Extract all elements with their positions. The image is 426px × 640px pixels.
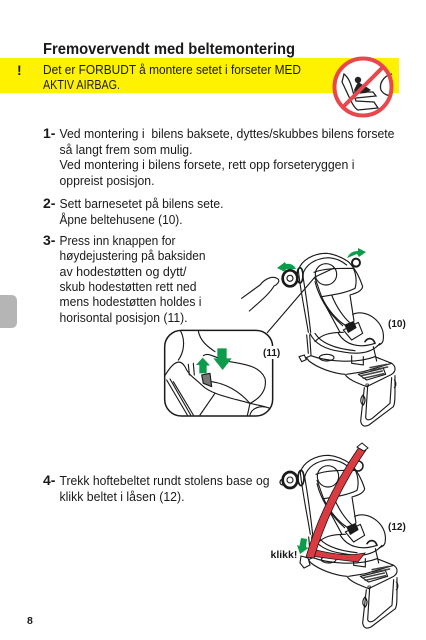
- knobs: [280, 461, 363, 488]
- step 3 text: 3-: [43, 232, 56, 248]
- hand and headrest knobs: [242, 259, 360, 311]
- step 1 text: Ved montering i bilens baksete, dyttes/skubbes bilens forsete: [60, 126, 394, 141]
- step 1 text: oppreist posisjon.: [60, 173, 154, 188]
- step 2 text: Sett barnesetet på bilens sete.: [60, 196, 224, 211]
- grey page tab: [0, 295, 17, 328]
- step 1 text: så langt frem som mulig.: [60, 142, 192, 157]
- step 1 text: Ved montering i bilens forsete, rett opp forseteryggen i: [60, 157, 355, 172]
- warning band: AKTIV AIRBAG.: [43, 77, 120, 92]
- leader line: [267, 268, 334, 333]
- step 3 text: mens hodestøtten holdes i: [60, 294, 202, 309]
- step 4 text: [43, 472, 270, 504]
- step 1 text: 1-: [43, 125, 56, 141]
- step 3 text: [43, 232, 206, 325]
- warning band: !: [17, 62, 22, 78]
- step 3 text: horisontal posisjon (11).: [60, 310, 188, 325]
- warning band: Det er FORBUDT å montere setet i forseter MED: [43, 62, 301, 77]
- step 3 text: høydejustering på baksiden: [60, 248, 206, 263]
- arrow: green down click: [297, 538, 308, 554]
- step 3 text: av hodestøtten og dytt/: [60, 264, 187, 279]
- title: Fremovervendt med beltemontering: [43, 41, 295, 58]
- belt end: [357, 443, 368, 451]
- arrow: green left: [277, 262, 296, 272]
- buckle: [300, 556, 310, 568]
- step 2 text: [43, 195, 224, 227]
- warning band: [0, 58, 399, 93]
- illustration: seat with headrest adjustment: [242, 248, 396, 426]
- arrow: green up: [196, 358, 210, 373]
- red shoulder belt: [306, 447, 366, 558]
- label (12): (12): [388, 522, 406, 533]
- icon: no child seat with airbag: [333, 57, 393, 117]
- arrow: green right: [347, 248, 366, 258]
- label (11): (11): [263, 348, 280, 359]
- step 2 text: Åpne beltehusene (10).: [60, 212, 182, 227]
- step 1 text: [43, 125, 394, 188]
- step 4 text: 4-: [43, 472, 56, 488]
- label klikk: klikk!: [270, 549, 297, 561]
- arrow: green down: [213, 348, 232, 370]
- step 4 text: Trekk hoftebeltet rundt stolens base og: [60, 473, 270, 488]
- step 2 text: 2-: [43, 195, 56, 211]
- step 3 text: Press inn knappen for: [60, 233, 176, 248]
- inset detail: [165, 330, 273, 416]
- page number: 8: [27, 615, 33, 627]
- step 4 text: klikk beltet i låsen (12).: [60, 489, 184, 504]
- step 3 text: skub hodestøtten rett ned: [60, 279, 196, 294]
- illustration: seat with belt: [280, 443, 398, 628]
- red lap belt: [311, 549, 365, 562]
- label (10): (10): [388, 319, 406, 330]
